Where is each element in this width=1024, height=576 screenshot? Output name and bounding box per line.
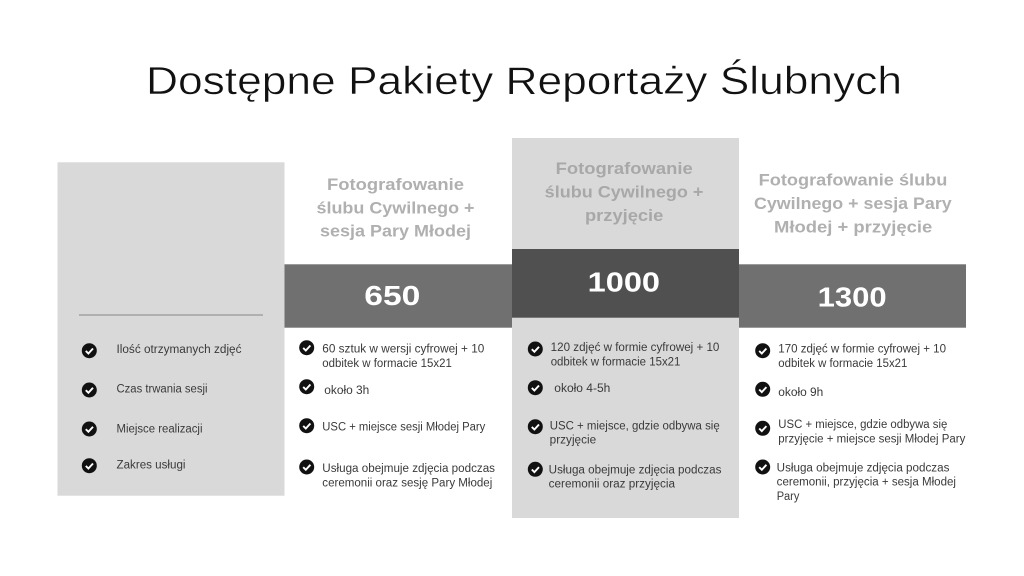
- item: photo count: odbitek w formacie 15x21: [551, 356, 680, 368]
- item: scope: [755, 460, 956, 503]
- item: scope: ceremonii, przyjęcia + sesja Młodej: [777, 477, 956, 489]
- title: Dostępne Pakiety Reportaży Ślubnych: [146, 58, 902, 103]
- item: location: USC + miejsce, gdzie odbywa się: [778, 419, 947, 431]
- item: duration: [528, 380, 610, 395]
- label: session duration: [82, 382, 208, 398]
- item: duration: [755, 382, 823, 399]
- item: photo count: 60 sztuk w wersji cyfrowej + 10: [322, 344, 484, 356]
- item: scope: Usługa obejmuje zdjęcia podczas: [322, 463, 495, 475]
- item: photo count: odbitek w formacie 15x21: [322, 358, 452, 370]
- item: photo count: [755, 343, 946, 370]
- item: photo count: odbitek w formacie 15x21: [778, 358, 907, 370]
- price band: packages 650 and 1300: [284, 264, 966, 328]
- label: number of photos: [82, 343, 242, 358]
- label: location: Miejsce realizacji: [116, 424, 202, 436]
- heading: package 3: Młodej + przyjęcie: [774, 218, 932, 236]
- panel: row labels: [58, 162, 284, 496]
- item: photo count: 120 zdjęć w formie cyfrowej + 10: [551, 342, 719, 354]
- item: scope: [528, 462, 722, 491]
- price: 1000: 1000: [588, 267, 660, 298]
- item: duration: [299, 379, 369, 397]
- item: location: [299, 418, 486, 434]
- item: scope: Usługa obejmuje zdjęcia podczas: [549, 464, 722, 476]
- item: scope: Pary: [777, 491, 800, 503]
- item: scope: ceremonii oraz sesję Pary Młodej: [322, 477, 492, 489]
- item: photo count: 170 zdjęć w formie cyfrowej + 10: [778, 344, 946, 356]
- label: number of photos: Ilość otrzymanych zdjęć: [116, 344, 242, 356]
- price: 1300: 1300: [818, 282, 887, 313]
- heading: package 2: Fotografowanie: [556, 160, 693, 178]
- item: scope: ceremonii oraz przyjęcia: [549, 479, 676, 491]
- heading: package 1: ślubu Cywilnego +: [316, 199, 474, 217]
- heading: package 2: ślubu Cywilnego +: [545, 184, 703, 202]
- panel: package 1000: [512, 138, 739, 518]
- item: location: przyjęcie: [550, 435, 596, 447]
- heading: package 3: Fotografowanie ślubu: [759, 171, 947, 189]
- heading: package 1: sesja Pary Młodej: [320, 223, 471, 241]
- label: scope of service: [82, 458, 186, 473]
- item: location: [755, 419, 966, 446]
- item: duration: około 4-5h: [554, 383, 610, 395]
- heading: package 2: przyjęcie: [585, 207, 663, 225]
- item: duration: około 9h: [778, 387, 823, 399]
- label: session duration: Czas trwania sesji: [116, 384, 208, 396]
- heading: package 2: [545, 160, 703, 225]
- item: location: USC + miejsce, gdzie odbywa się: [550, 420, 720, 432]
- label: scope of service: Zakres usługi: [116, 460, 186, 472]
- item: photo count: [528, 342, 719, 368]
- item: photo count: [299, 340, 484, 370]
- heading: package 1: [316, 176, 474, 241]
- item: location: przyjęcie + miejsce sesji Młodej Pary: [778, 434, 966, 446]
- item: scope: Usługa obejmuje zdjęcia podczas: [777, 462, 950, 474]
- heading: package 3: [754, 171, 953, 236]
- panel: package 650: [299, 176, 495, 489]
- item: location: USC + miejsce sesji Młodej Pary: [322, 422, 486, 434]
- heading: package 1: Fotografowanie: [327, 176, 464, 194]
- item: duration: około 3h: [324, 385, 369, 397]
- heading: package 3: Cywilnego + sesja Pary: [754, 195, 953, 213]
- item: scope: [299, 460, 495, 489]
- panel: package 1300: [754, 171, 966, 503]
- label: location: [82, 422, 202, 436]
- price: 650: 650: [364, 280, 420, 311]
- item: location: [528, 419, 720, 447]
